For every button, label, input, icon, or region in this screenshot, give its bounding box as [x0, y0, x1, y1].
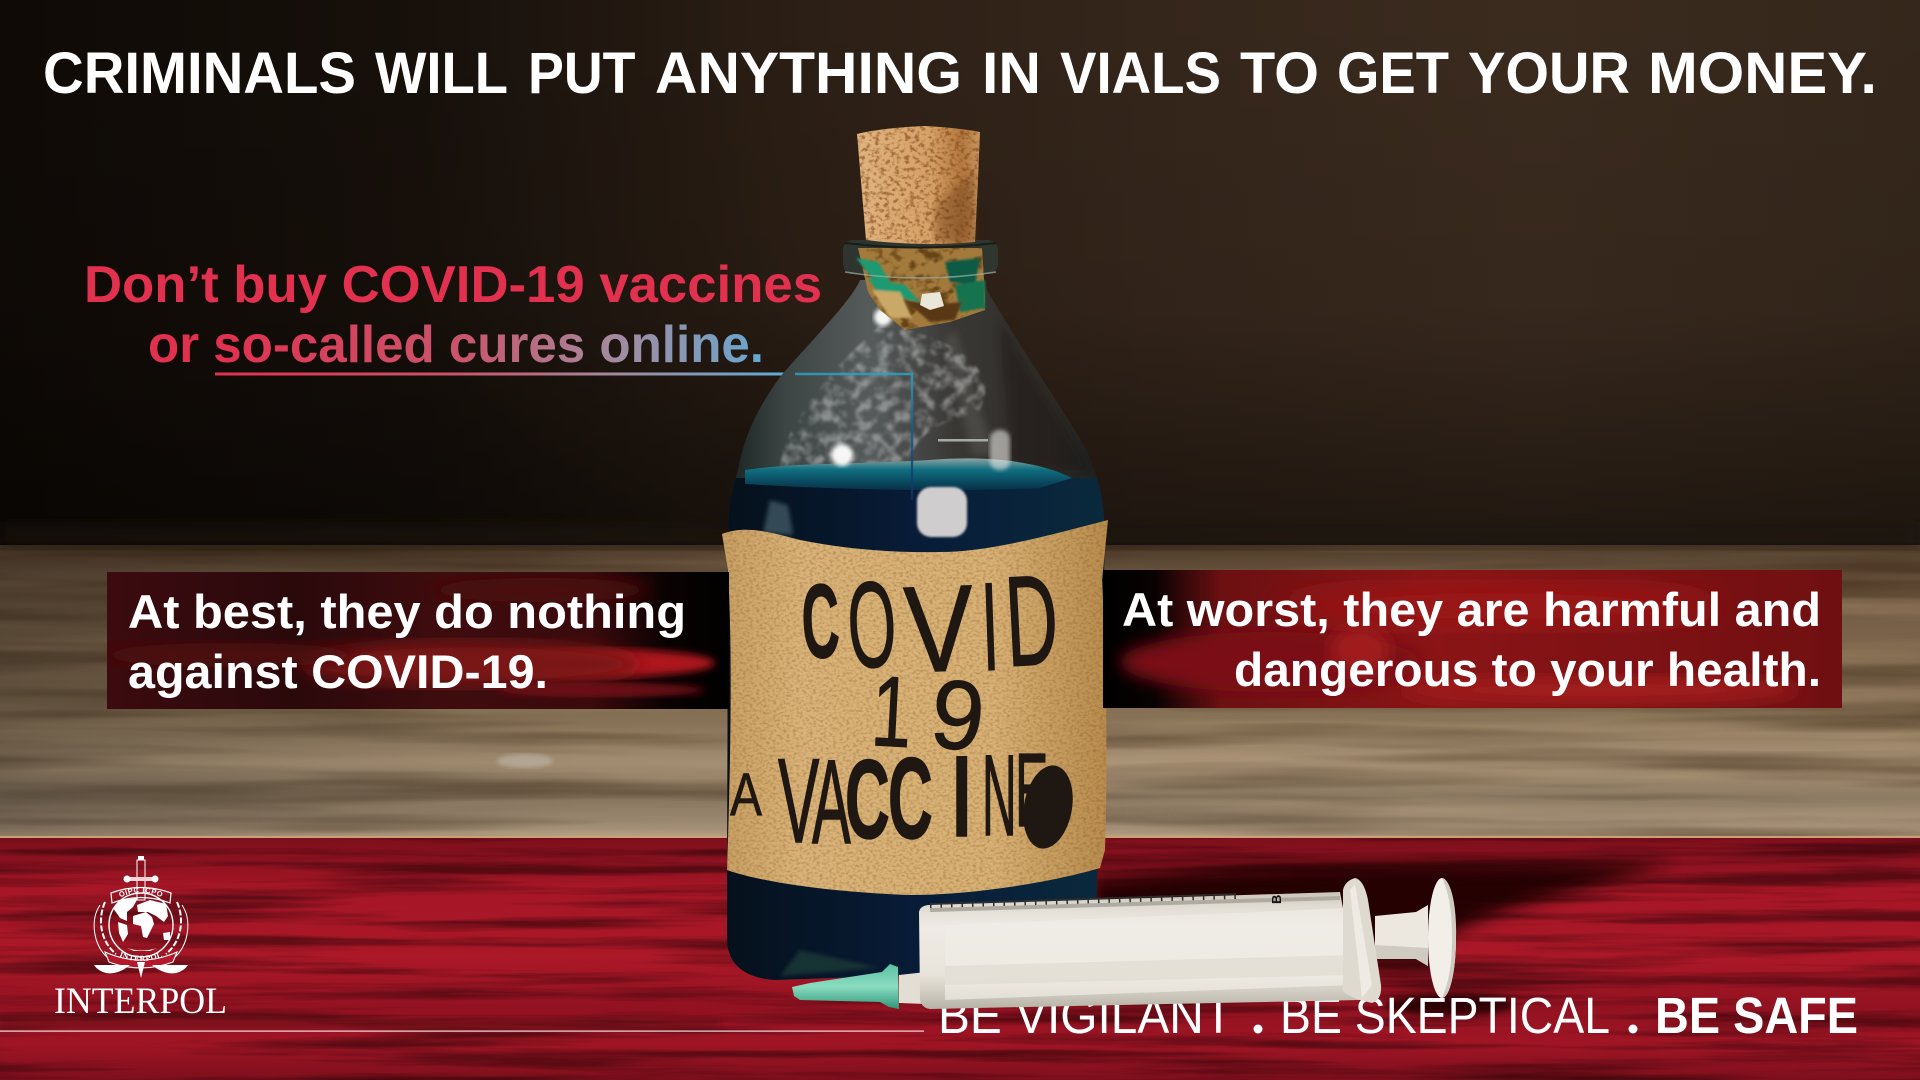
handwritten label: COVID: I	[979, 557, 1001, 697]
handwritten label: VACCINE: N	[982, 731, 1017, 860]
handwritten label: 19: 9	[926, 659, 990, 773]
INTERPOL emblem: INTERPOL	[120, 952, 162, 962]
at worst text: At worst, they are harmful and	[1122, 583, 1821, 636]
syringe shadow	[1090, 862, 1675, 1016]
needle hub	[792, 964, 926, 1009]
laurel wreath	[94, 902, 188, 958]
headline underline	[215, 372, 795, 376]
background: dark wall	[0, 0, 1920, 560]
at best text: against COVID-19.	[128, 645, 548, 698]
teal guide line	[795, 374, 912, 500]
INTERPOL emblem: OIPC ICPO	[119, 888, 162, 897]
syringe	[792, 878, 1456, 1009]
handwritten label: COVID: O	[844, 555, 900, 694]
handwritten label: COVID	[800, 549, 1061, 698]
sword	[137, 860, 145, 900]
slogan: BE SAFE	[1655, 987, 1858, 1044]
title: TO	[1240, 41, 1319, 106]
handwritten label: VACCINE: E	[1015, 733, 1048, 849]
INTERPOL wordmark: INTERPOL	[54, 981, 227, 1022]
title: MONEY.	[1648, 41, 1877, 106]
vial glass body	[720, 280, 1120, 998]
at worst text	[1122, 583, 1821, 696]
warning headline	[84, 256, 822, 376]
title: ANYTHING	[655, 41, 962, 106]
title: VIALS	[1060, 41, 1221, 106]
brand mark: B	[1269, 895, 1284, 904]
barrel flange	[1343, 878, 1381, 1003]
vial	[720, 122, 1120, 998]
warning line 1: Don’t buy COVID-19 vaccines	[84, 256, 822, 314]
plunger	[1375, 878, 1456, 998]
barrel	[919, 892, 1360, 1009]
handwritten label: VACCINE: C	[845, 738, 890, 863]
paper label	[722, 520, 1108, 896]
top banner	[111, 888, 171, 903]
slogan: BE SKEPTICAL	[1280, 987, 1610, 1044]
vial neck	[843, 240, 998, 333]
cork	[857, 126, 980, 244]
title: CRIMINALS	[43, 41, 356, 106]
warning line 2: or so-called cures online.	[148, 316, 764, 374]
title: PUT	[528, 41, 636, 106]
handwritten label: VACCINE: I	[952, 733, 971, 861]
INTERPOL emblem	[94, 856, 188, 978]
handwritten label: COVID: V	[902, 559, 976, 698]
handwritten label: 19: 1	[869, 656, 915, 769]
at best text: At best, they do nothing	[128, 585, 686, 638]
callout: at worst	[1103, 570, 1842, 708]
title: IN	[982, 41, 1041, 106]
title: WILL	[375, 41, 508, 106]
title	[43, 41, 1877, 106]
handwritten label: VACCINE	[730, 731, 1079, 868]
background: blurred wood plank	[0, 522, 1920, 838]
title: GET	[1337, 41, 1449, 106]
title: YOUR	[1468, 41, 1630, 106]
handwritten label: COVID: D	[1002, 549, 1061, 694]
handwritten label: 19	[869, 656, 990, 773]
background: red table	[0, 836, 1920, 1080]
at best text	[128, 585, 686, 698]
footer rule	[0, 1030, 924, 1032]
slogan: BE VIGILANT	[938, 987, 1233, 1044]
handwritten label: COVID: C	[800, 562, 841, 681]
at worst text: dangerous to your health.	[1234, 643, 1821, 696]
globe	[109, 893, 173, 957]
handwritten label: VACCINE: C	[888, 733, 933, 863]
callout: at best	[100, 572, 729, 709]
graduation scale	[930, 894, 1236, 904]
highlights	[874, 308, 892, 326]
scales	[94, 965, 130, 973]
handwritten label: VACCINE: A	[730, 761, 763, 828]
handwritten label: VACCINE: A	[812, 735, 851, 868]
handwritten label: VACCINE: V	[778, 735, 820, 868]
slogan	[938, 987, 1858, 1044]
bottom banner	[105, 952, 177, 968]
